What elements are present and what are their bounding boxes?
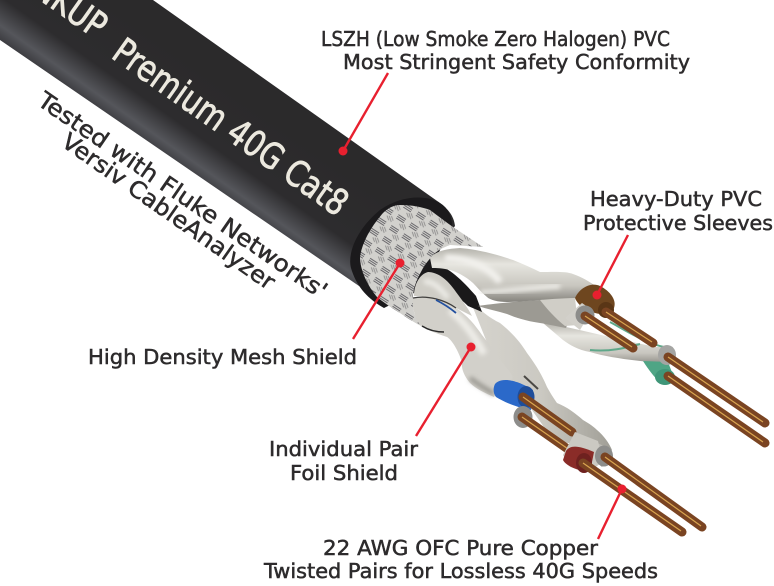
- heading: LSZH jacket label: [321, 27, 690, 74]
- label: sleeves: Protective Sleeves: [583, 211, 773, 235]
- label: sleeves: [583, 187, 773, 235]
- copper wires and sleeves: [494, 285, 765, 532]
- label: sleeves: Heavy-Duty PVC: [590, 187, 762, 211]
- leader: sleeves: [592, 235, 628, 300]
- upper lobe: [414, 272, 472, 316]
- label: mesh shield: High Density Mesh Shield: [88, 345, 357, 369]
- blue sleeve wires: [494, 380, 572, 452]
- leader: mesh shield: [353, 258, 404, 339]
- cable print text: [9, 0, 356, 225]
- cable print text: Premium 40G Cat8: [105, 31, 356, 225]
- foil sleeve near red pair: [576, 436, 612, 466]
- label: foil shield: Individual Pair: [269, 437, 419, 461]
- main upper strand: [430, 248, 597, 302]
- label: foil shield: Foil Shield: [290, 461, 398, 485]
- braided mesh shield: [360, 205, 483, 328]
- heading: LSZH jacket label: Most Stringent Safety Conformity: [343, 50, 690, 74]
- label: Fluke test note: Tested with Fluke Networks': [32, 87, 332, 304]
- leader: copper: [598, 484, 626, 539]
- brown sleeve wires: [565, 285, 653, 348]
- rear lower strand: [470, 300, 612, 467]
- label: copper: Twisted Pairs for Lossless 40G Speeds: [263, 559, 658, 583]
- red sleeve wires: [563, 432, 702, 532]
- heading: LSZH jacket label: LSZH (Low Smoke Zero Halogen) PVC: [321, 27, 670, 51]
- lower shielded strand: [540, 298, 578, 326]
- label: foil shield: [269, 437, 419, 485]
- green stripe: [590, 322, 664, 351]
- lower foil pair: [413, 262, 612, 467]
- third strand: [543, 323, 673, 366]
- label: copper: 22 AWG OFC Pure Copper: [323, 536, 599, 560]
- cable outer jacket: [0, 0, 455, 308]
- label: Fluke test note: Versiv CableAnalyzer: [57, 129, 280, 296]
- upper foil pair: [430, 248, 673, 384]
- second strand: [478, 300, 574, 328]
- leader: foil shield: [416, 342, 476, 436]
- dark gap: [420, 262, 482, 312]
- leader: jacket: [338, 73, 388, 156]
- front lower strand: [413, 297, 512, 397]
- green sleeve wires: [655, 345, 765, 443]
- label: copper: [263, 536, 658, 583]
